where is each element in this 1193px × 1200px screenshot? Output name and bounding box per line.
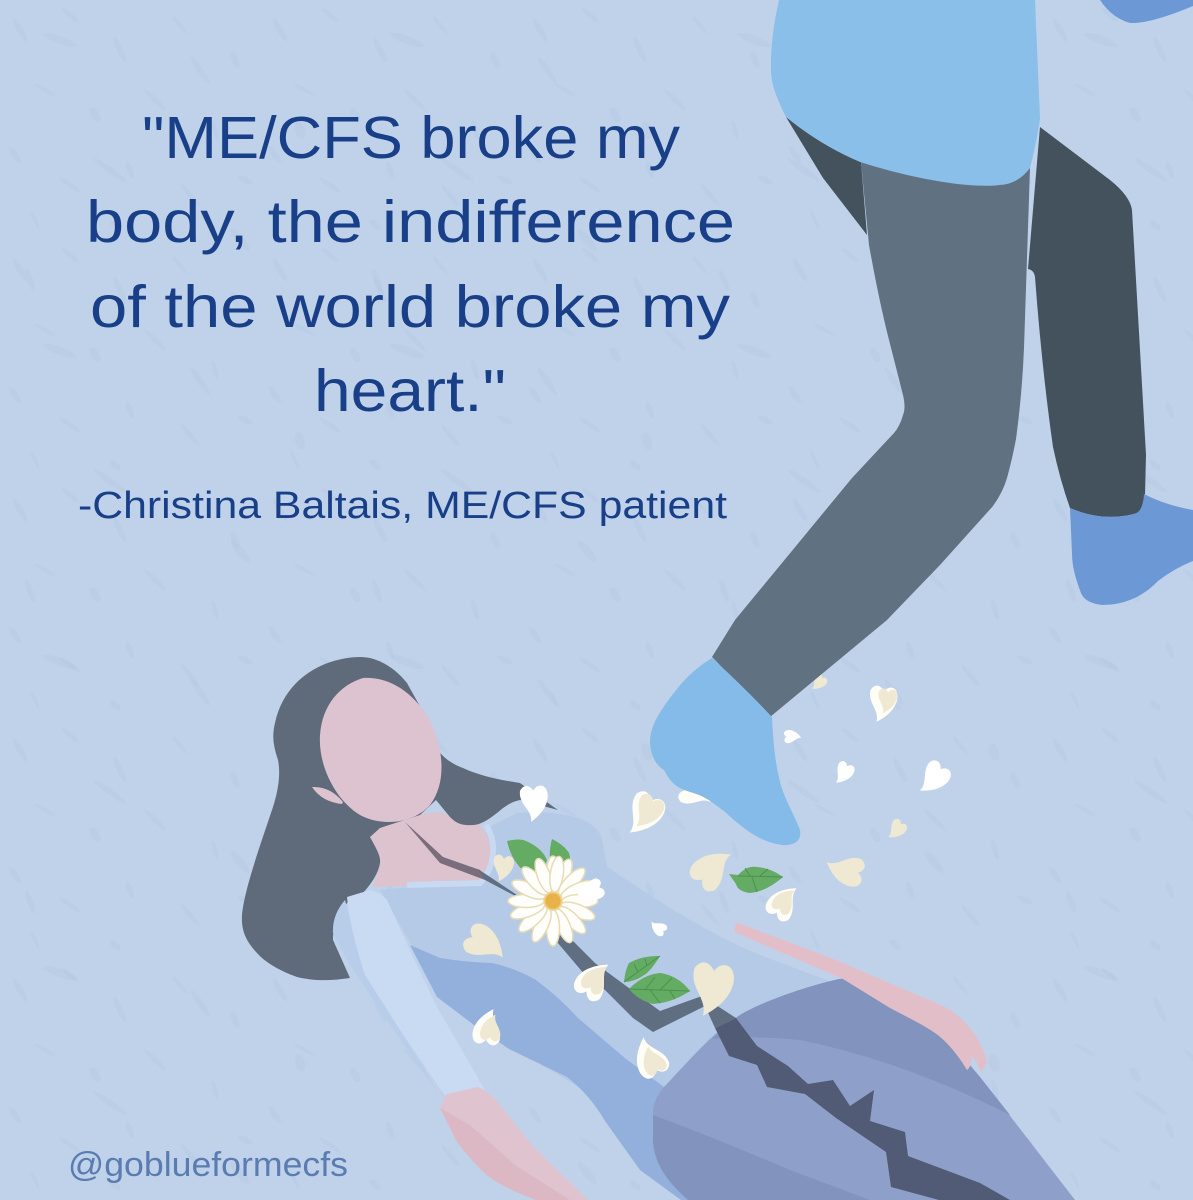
quote: "ME/CFS broke my xyxy=(142,105,681,171)
quote: body, the indifference xyxy=(86,189,735,255)
quote: heart." xyxy=(314,358,506,424)
right arm xyxy=(734,922,987,1072)
daisy flower xyxy=(507,839,598,946)
crack at neck xyxy=(405,822,485,880)
front foot xyxy=(650,658,800,845)
jeans shading xyxy=(653,979,1010,1200)
sleeve xyxy=(347,890,485,1096)
leaf veins xyxy=(624,868,783,1003)
face xyxy=(320,678,442,822)
dress band xyxy=(410,945,702,1200)
neck and chest xyxy=(343,802,490,887)
sleeve shadow xyxy=(333,900,440,1095)
social handle: @goblueformecfs xyxy=(68,1146,348,1184)
top figure stepping on flower xyxy=(650,0,1193,845)
hair xyxy=(242,657,558,980)
flower centre xyxy=(544,892,562,910)
front leg xyxy=(712,162,1030,717)
back leg xyxy=(786,117,1146,517)
flower petals xyxy=(508,856,598,946)
ear xyxy=(312,787,343,804)
other shoe top right xyxy=(1100,0,1193,23)
falling petals xyxy=(461,686,954,1084)
quote xyxy=(86,105,735,424)
forearm shading xyxy=(440,1108,570,1200)
attribution: -Christina Baltais, ME/CFS patient xyxy=(78,485,727,527)
back foot xyxy=(1070,494,1193,605)
quote: of the world broke my xyxy=(90,274,731,340)
crack over jeans xyxy=(715,1018,1010,1200)
collar xyxy=(407,825,493,885)
crack upper branch xyxy=(478,869,736,1032)
flower leaves xyxy=(507,839,570,873)
torso xyxy=(380,812,880,1100)
petals behind foot xyxy=(677,672,829,808)
jeans xyxy=(653,979,1075,1200)
lying woman xyxy=(242,657,1075,1200)
leaf shapes xyxy=(624,867,783,1004)
branch and floating leaves xyxy=(624,867,783,1004)
shirt xyxy=(771,0,1040,186)
crack in body xyxy=(405,822,1010,1200)
forearm xyxy=(440,1087,588,1200)
